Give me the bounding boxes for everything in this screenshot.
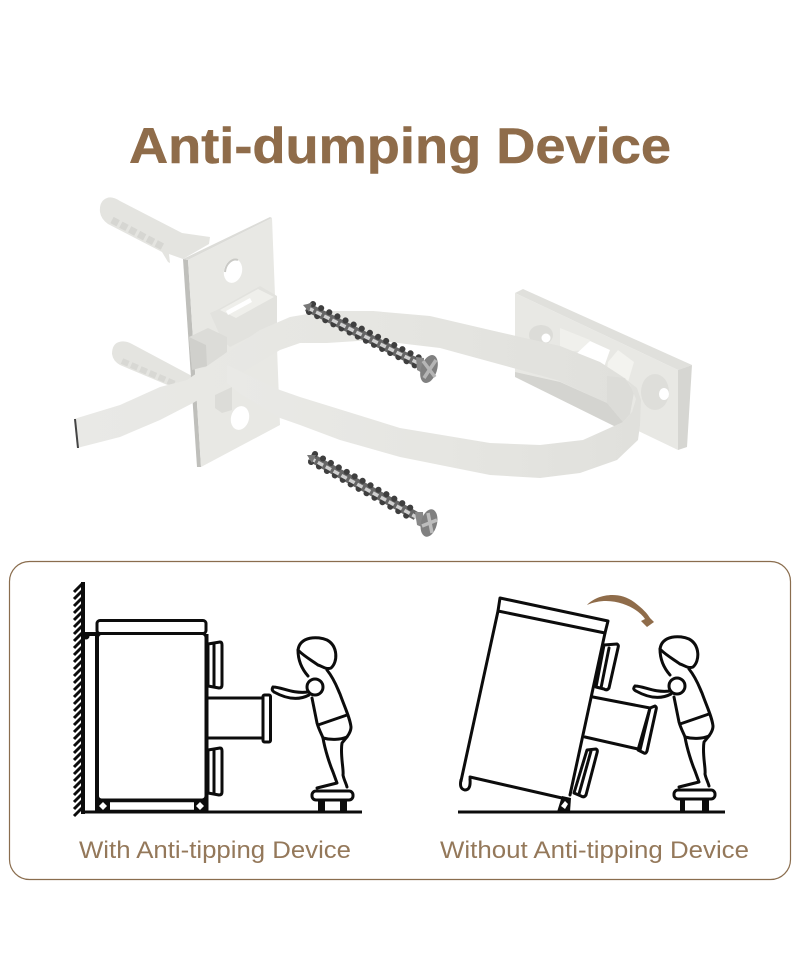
strap xyxy=(74,311,641,478)
icon: upper wall anchor xyxy=(100,197,210,263)
arrow: tipping direction xyxy=(587,595,654,627)
child with hands out xyxy=(634,637,715,812)
ground line xyxy=(458,810,725,814)
right wall bracket plate xyxy=(515,289,692,450)
strap: far band from left end to right bracket xyxy=(74,311,634,448)
product illustration: anti-dumping device kit xyxy=(74,197,692,539)
icon: upper screw xyxy=(303,303,441,385)
diagram: without anti-tipping device xyxy=(458,595,725,812)
caption: without device: Without Anti-tipping Device xyxy=(440,837,749,864)
diagram: with anti-tipping device xyxy=(74,582,362,816)
bracket clip xyxy=(189,286,277,413)
step stool xyxy=(312,791,353,812)
ground line xyxy=(83,810,362,814)
wall with hatching xyxy=(74,582,83,816)
icon: lower screw xyxy=(307,454,440,539)
title: Anti-dumping Device xyxy=(129,118,671,174)
upper door handle xyxy=(596,644,618,690)
caption: with device: With Anti-tipping Device xyxy=(79,837,351,864)
strap: near band wrapping around xyxy=(227,365,641,478)
upper door handle xyxy=(208,642,222,688)
icon: lower wall anchor xyxy=(112,341,192,392)
tilted washing machine xyxy=(460,598,608,812)
left wall bracket plate xyxy=(183,217,280,467)
lower door handle xyxy=(208,748,222,795)
panel: tipping comparison xyxy=(10,562,790,880)
washing machine body xyxy=(82,620,207,812)
lower door handle xyxy=(574,749,597,797)
pulled-out drawer xyxy=(207,695,270,742)
child pushing drawer xyxy=(272,638,353,812)
tilted drawer xyxy=(585,697,656,753)
step stool xyxy=(674,790,715,812)
